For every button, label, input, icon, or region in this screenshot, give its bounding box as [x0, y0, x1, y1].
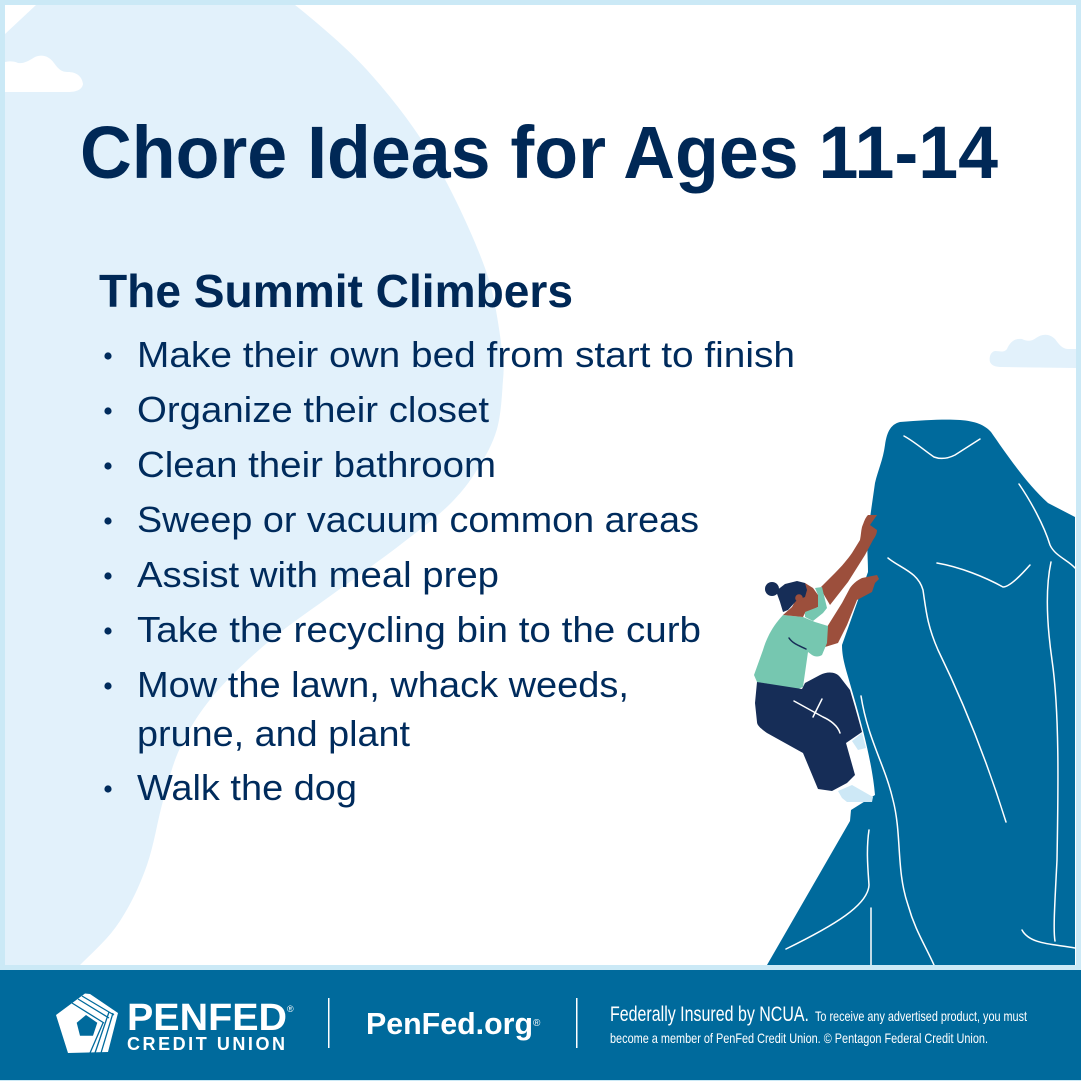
ear — [795, 594, 803, 602]
chore list: Sweep or vacuum common areas — [137, 499, 699, 540]
website: PenFed.org — [366, 1006, 533, 1041]
cloud: right — [990, 335, 1076, 368]
upper arm — [820, 515, 877, 605]
legal disclaimer: To receive any advertised product, you must — [815, 1008, 1027, 1024]
website: ® — [533, 1018, 541, 1029]
subheading: The Summit Climbers — [99, 265, 573, 317]
socks — [838, 733, 873, 802]
chore list: Make their own bed from start to finish — [137, 334, 795, 375]
legal disclaimer: Federally Insured by NCUA. — [610, 1003, 809, 1026]
climber figure — [754, 515, 879, 802]
PENFED wordmark: ® — [287, 1004, 294, 1014]
trousers — [755, 673, 862, 791]
lower arm — [825, 575, 879, 647]
hair — [765, 581, 807, 612]
icon: PenFed pentagon logo — [56, 994, 118, 1053]
chore list: Clean their bathroom — [137, 444, 496, 485]
chore list: Mow the lawn, whack weeds, — [137, 664, 629, 705]
shirt — [754, 615, 828, 689]
legal disclaimer — [610, 1003, 1027, 1046]
background blob — [5, 5, 504, 965]
PENFED wordmark: PENFED — [127, 997, 287, 1039]
rock illustration — [767, 420, 1075, 965]
footer band — [0, 970, 1081, 1080]
chore list: prune, and plant — [137, 713, 410, 754]
PENFED wordmark — [127, 997, 294, 1054]
chore list: Take the recycling bin to the curb — [137, 609, 701, 650]
chore list — [104, 334, 795, 808]
chore list: Assist with meal prep — [137, 554, 499, 595]
collar — [805, 587, 827, 621]
title: Chore Ideas for Ages 11-14 — [80, 111, 998, 194]
PENFED wordmark: CREDIT UNION — [127, 1034, 285, 1054]
face — [783, 583, 818, 617]
cloud: top left — [5, 56, 83, 92]
chore list: Walk the dog — [137, 767, 357, 808]
chore list: Organize their closet — [137, 389, 489, 430]
